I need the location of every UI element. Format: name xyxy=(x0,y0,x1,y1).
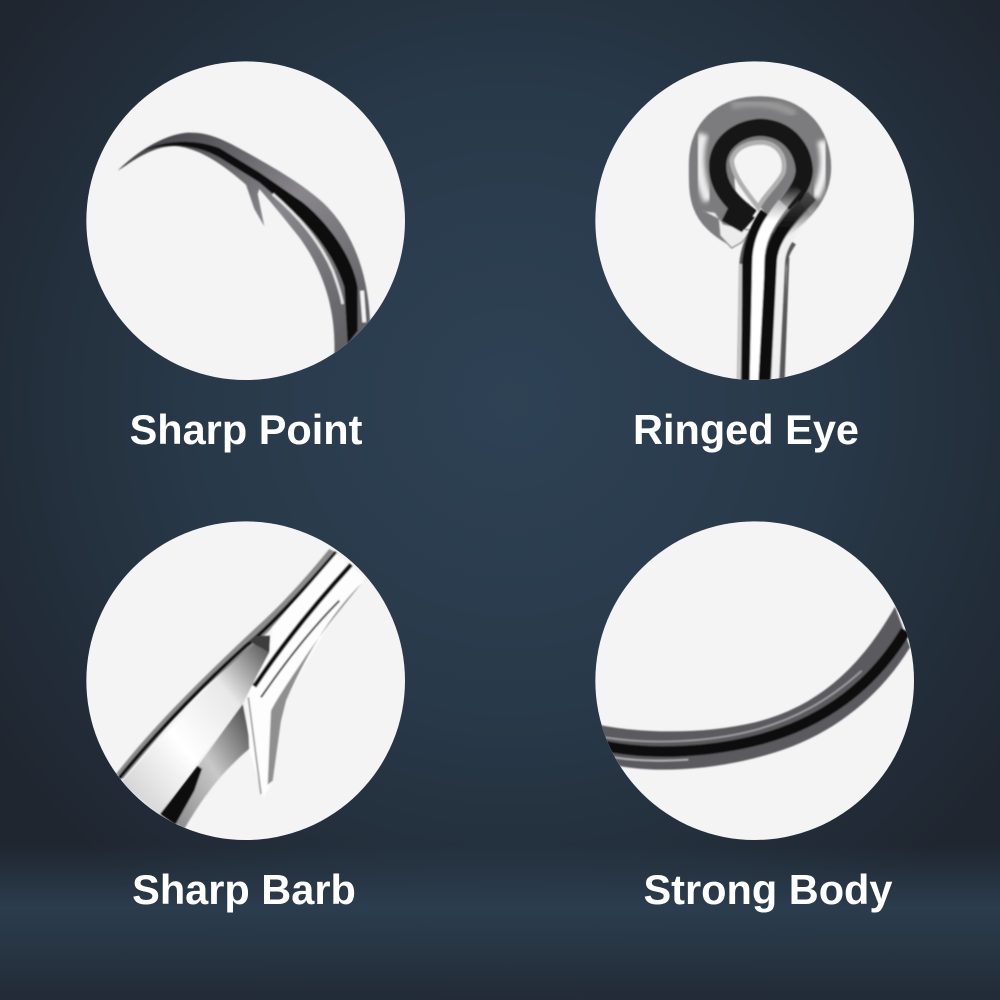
panel: sharp point xyxy=(86,61,405,380)
heading: Sharp Barb: Sharp Barb xyxy=(132,866,356,913)
heading: Strong Body: Strong Body xyxy=(644,866,892,913)
icon: hook point body xyxy=(118,133,370,356)
panel: sharp barb xyxy=(86,521,405,840)
icon: barb lower body xyxy=(173,704,251,829)
icon: eye ring xyxy=(699,103,824,248)
icon: barb shaft xyxy=(247,553,366,798)
icon: shank xyxy=(739,187,817,382)
heading: Sharp Point: Sharp Point xyxy=(130,406,363,453)
heading: Ringed Eye: Ringed Eye xyxy=(633,406,859,453)
icon: hook wire xyxy=(598,607,910,770)
panel: strong body xyxy=(595,521,914,840)
icon: barb main body xyxy=(121,636,270,816)
panel: ringed eye xyxy=(595,61,914,382)
